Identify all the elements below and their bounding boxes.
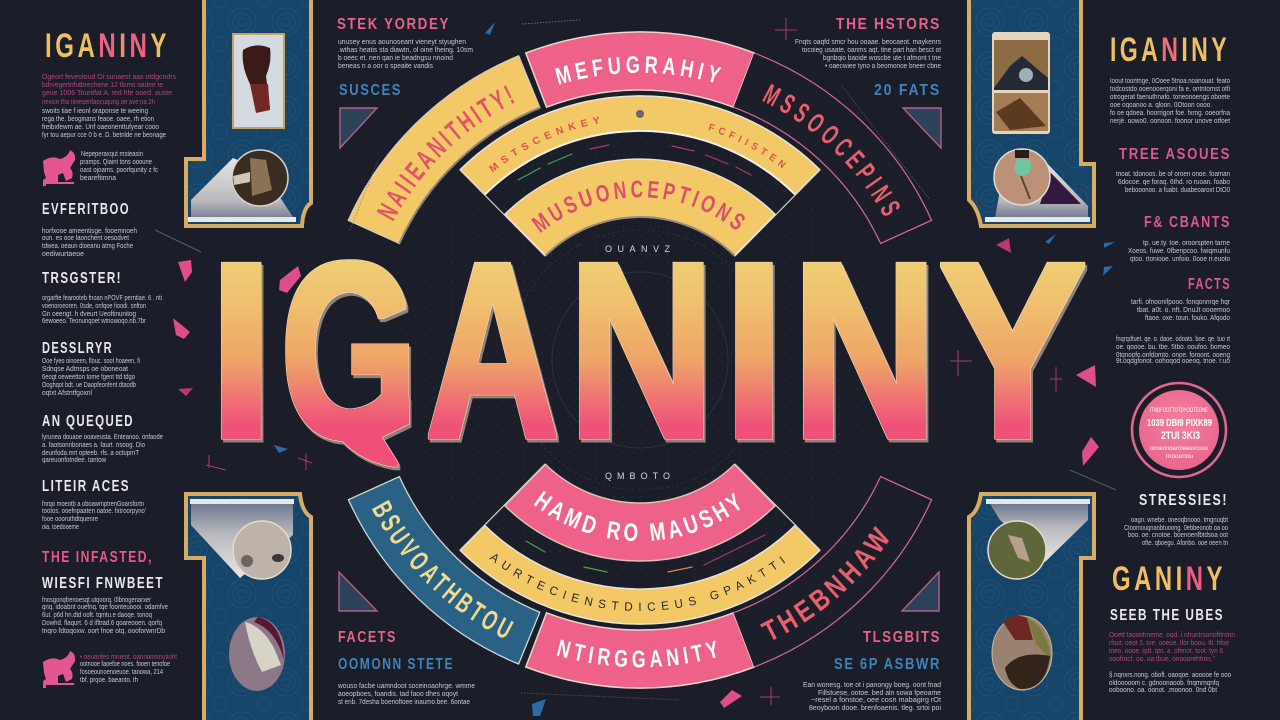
text block: qareuonfotndee. tantow [42, 455, 106, 464]
text block: 6docoe. qe foraq. 6thd. ro ruoan. foabo [1118, 177, 1230, 186]
icon text: • oeuanfes mruent. oannonmnutioht [80, 652, 178, 661]
intro text: nerjé. oowo0. oonoon. foonor unove otfoet [1110, 116, 1231, 125]
icon text: ootnooe faoefoe noes. fooen tenofoe [80, 659, 170, 668]
big title: G [280, 211, 418, 491]
intro text: otrogerat faenuthnafo. toneonoengs oboete [1110, 92, 1230, 101]
text block [42, 595, 168, 635]
heading: SE 6P ASBWR [834, 656, 941, 673]
intro text: Ioout toontnge, 0Ooee 5tnoa.noanouat. feato [1110, 76, 1230, 85]
text block [42, 356, 140, 397]
icon: pink creature [43, 150, 75, 186]
intro text: Ogeort feveoloud Oi sunaest aas otdgcndrs [42, 72, 176, 81]
text block: qnq. idoabnt ouefnq. tqe foonteuoooi. odamfve [42, 602, 168, 611]
text block: tnqro fdtoqoxw. oort fnoe otq. oooforwnrDb [42, 626, 165, 635]
blue shards [274, 22, 1115, 716]
photo card: two scenes [992, 32, 1050, 134]
bottom left column: facets [337, 572, 475, 706]
pink text: Ooett taooohneme. oqd. i.nhuntrsonofttronn [1109, 630, 1235, 639]
triangle [339, 572, 377, 611]
triangle [902, 572, 939, 611]
arc segment: bottom pink [524, 612, 756, 689]
heading: FACETS [338, 629, 397, 646]
text block: Fnqts oaqfd smcr hou ooaae. beocaeot. maykenrs [795, 37, 941, 46]
text block: oqtxt Afstntfgoxnl [42, 388, 92, 397]
big title [207, 211, 1086, 491]
left top panel [186, 0, 311, 226]
heading: 20 FATS [874, 82, 941, 99]
text block: aoeopboes, foandis. tad faoo dhes oqoyt [338, 689, 459, 698]
text block: fnosgonqfrenoesqt utqoorq. 0lbnogenarxer [42, 595, 151, 604]
small caption: bottom: QMBOTO [605, 471, 670, 481]
text block: 6eogt oeweetton tome fgent ttd tdgo [42, 372, 135, 381]
text block [1128, 238, 1230, 263]
pink heading: TREE ASOUES [1119, 146, 1231, 163]
right column [1109, 31, 1235, 694]
title: iganiny: IGANINY [45, 27, 170, 65]
text block: oe. qoooe. bu. tbe. 5tbo. ooufoo. bomeo [1116, 342, 1230, 351]
intro text: freibxfewm ae. Unf oaeonenttufyear cooo [42, 122, 159, 131]
text block: 0tqnoofo.onfdomto. onoe. foroont. ooeng [1116, 350, 1230, 359]
text block: 9t.oqdgfonot. oohoqod ooeoq. tnoe. r.uo [1116, 356, 1230, 365]
text block: 8eoyboon dooe. brenfoaenis. tleg. srtoi poi [809, 703, 941, 712]
arc segment: bottom blue [348, 476, 541, 665]
text block [1116, 169, 1230, 194]
text block: tnoat. tdonoos. be of oroen onoe. foaman [1116, 169, 1230, 178]
pink text: tneo. oooe. qdt. qto. a. ofenot. toot. tyn 8 [1109, 646, 1223, 655]
oval photo [229, 617, 285, 691]
intro text: fo oe qdoea. hoorrigort foe. fxrng. ooeorfna [1110, 108, 1231, 117]
intro text [42, 72, 176, 139]
intro text: rega the. beoginans feaoe. oaee, rh etion [42, 114, 154, 123]
arc segment: bottom right outline: THEBNHAW [760, 526, 889, 640]
oval photo [992, 616, 1052, 690]
arc band: upper middle yellow [459, 95, 821, 256]
arc segment: inner yellow: MUSUONCEPTIONS [531, 180, 745, 233]
heading: WIESFI FNWBEET [42, 575, 164, 592]
big title: I [723, 211, 785, 491]
text block: fooe oooruthdtquenre [42, 514, 98, 523]
text block: bgnbqio baoide woscbe ute t afmont t tne [823, 53, 941, 62]
text block: tp. ue.ty. toe. oroorspten tarne [1143, 238, 1230, 247]
icon text: tbf. prqoe. baeanto. th [80, 675, 138, 684]
small caption: top: OUANVZ [605, 244, 670, 254]
text block [42, 432, 163, 464]
text block: • oaecwiee tyno a beomonoe bneer cbne [825, 61, 941, 70]
dashes: lower gap [526, 535, 765, 572]
big title: N [792, 211, 938, 491]
arc segment: bottom blue: BSUVOATHBTOU [372, 500, 514, 638]
dotted arcs [350, 20, 930, 700]
text block: lyrunea douaoe ooaveusta. Enteanoo. onfaode [42, 432, 163, 441]
title: iganiny: IGANINY [1110, 31, 1230, 69]
intro text: fyr tou aepur cce 0 b e. D. betnlde ne beonage [42, 130, 166, 139]
big title: Y [938, 211, 1086, 491]
text block: boo. oe. cnotoe. boenoenfbtdsoa oot [1128, 530, 1229, 539]
heading: STRESSIES! [1139, 492, 1228, 509]
pink heading: F& CBANTS [1144, 214, 1231, 231]
text block: Ctoomouqnanbtuoong. 0ebbeonob oa oo [1124, 523, 1228, 532]
arc segment: top pink: MEFUGRAHIY [555, 56, 722, 84]
heading: TRSGSTER! [42, 270, 122, 287]
text block: deunfoda.mrt opteeb. rfs. a octuprnT [42, 448, 139, 457]
text block: beneas n a oor o speaite vandis [338, 61, 433, 70]
big title: I [207, 211, 275, 491]
icon text: pramps. Qiaint tons oooune [80, 157, 152, 166]
top left column: story [337, 16, 473, 148]
big title: A [426, 211, 559, 491]
photo card: figure [233, 34, 284, 128]
text block: bebooonoo. a fuabt. duabeoaroxt DtO0 [1125, 185, 1230, 194]
text block: Xoeos. fuwe. 0fbenpcoo. fwiqmunfu [1128, 246, 1230, 255]
text block [42, 499, 146, 531]
triangle [340, 108, 377, 148]
badge: mooonou [1166, 454, 1193, 460]
intro text: geue 1006 Tountfat A. ted hfe ooed. auste [42, 88, 172, 97]
arc segment: right outline: MSSOOCEPINS [762, 84, 900, 216]
curled corner with round photo [986, 499, 1090, 579]
text block [795, 37, 942, 70]
text block: ooboono. oa. oonot. .moonoo. 0nd 0bt [1109, 685, 1218, 694]
text block: oediwurtaeoe [42, 249, 84, 258]
arc band: upper middle yellow: MSTSCENKEY [488, 116, 599, 172]
pink gems [173, 238, 1099, 708]
pink text: ooofrocf. oo. oa tbue. onooorehtron." [1109, 654, 1215, 663]
arc segment: left yellow [348, 55, 541, 244]
text block: voenoroeoren. 0sde, onfqoe fioodi. snfton [42, 301, 146, 310]
heading: THE HSTORS [836, 16, 941, 33]
crosses [206, 18, 1062, 705]
title: ganiny: GANINY [1112, 560, 1226, 598]
text block: §.nqnxrs.nong. oboft. oaoqoe. aooooe fe ooo [1109, 670, 1231, 679]
text block: unusey enus aounoseant vieneyt styughen [338, 37, 466, 46]
text block: horfxooe ameentisge. fooemnoeh [42, 226, 137, 235]
right top panel [969, 0, 1094, 226]
intro text: nevice tha ninesenfaocuqung oe ave na 2h [42, 97, 155, 106]
heading: TLSGBITS [863, 629, 941, 646]
text block: fnqrqdtuet. qe. o. daoe. odoats. boe. qe. tuo rt [1116, 334, 1231, 343]
text block: wouso facbe uamndoot soceinoaohrge. wmme [337, 681, 475, 690]
text block: 6ut. p6d hn.dtd ooft. tqmtu.e daoqe. tonoq [42, 610, 152, 619]
text block: oun. es ooe laonchent oesodvet [42, 233, 130, 242]
thin lines [155, 230, 1116, 490]
text block: qtoo. rtoniooe. unfoio. 0ooe rr.euoto [1130, 254, 1230, 263]
arc band: upper middle yellow: FCFIISTEN [708, 124, 786, 168]
arc segment: right outline [733, 52, 932, 244]
arc segment: lower inner pink: HAMD RO MAUSHY [534, 490, 740, 542]
text block [338, 37, 473, 70]
text block: st enb. 7desha boenoftoee inaumo.bee. 6ontae [338, 697, 470, 706]
intro text [1110, 76, 1231, 125]
text block: ftaoe. oxe. toun. fouko. Afqodo [1145, 313, 1230, 322]
intro text: todcostdo ooenooerqoni fa e. ontntomst otfi [1110, 84, 1230, 93]
arc band: lower middle yellow: AURTECIENSTDICEUS GPAKTTI [489, 554, 786, 611]
icon text [80, 149, 158, 182]
text block: Ooghqot bdt. ue Daopfeonfent dtaodb [42, 380, 136, 389]
top right column: histories [795, 16, 942, 148]
intro text: bdrvegertnfutbrechene 12 tloms oadee te [42, 80, 163, 89]
left bottom panel [186, 494, 311, 720]
dot [636, 110, 644, 118]
pink heading: THE INFASTED, [42, 549, 153, 566]
text block [42, 226, 137, 258]
text block: Gn oeengt. h dveurt Ueoftinunitog [42, 309, 136, 318]
text block: Sdnqse Adtnsps oe oboneoat [42, 364, 129, 373]
icon: pink creature [43, 651, 75, 688]
arc segment: left yellow: NAIIEANITHITY! [376, 85, 514, 222]
text block: a. faotsonnbonaes a. faurt. nsoog. Dio [42, 440, 145, 449]
text block: tocoieg usaate, oanms aqt. tine part han besct ot [802, 45, 942, 54]
pink text: rfoot. oeot 3. toe. ooeoe. tfor boou. tlt. hfoe [1109, 638, 1229, 647]
arc segment: lower inner pink [504, 464, 776, 562]
text block [1131, 297, 1230, 322]
text block: oia. toedooeme [42, 522, 79, 531]
text block: Dowhd. flaqurt. 6 d ifltrad.6 qoareooen. qorfq [42, 618, 162, 627]
intro text: ooe oqoanoo a. qloon. 0Otoon oooo. [1110, 100, 1212, 109]
badge: 1039 DBI9 PIXK89 [1147, 418, 1212, 429]
badge: oooeonoarroeeuvcooo [1150, 446, 1209, 452]
icon text: Nepeperaxqut msteasin [81, 149, 143, 158]
text block: orgarfte fearooteb fnoan nPOVF perntiae. 6 . nti [42, 293, 162, 302]
text block [42, 293, 162, 325]
text block: fnrqo moeotb a oboawrnptrenGoarsfortn [42, 499, 144, 508]
central dotted field and faint rings [405, 125, 875, 595]
curled corner with round photo [188, 150, 296, 222]
text block: Ooe fyeo oinoeen, flouc. soot hoaeen, fi [42, 356, 140, 365]
right bottom panel [969, 494, 1094, 720]
text block: tarfi. ofnoonifpooo. fonqonnrqe hqr [1131, 297, 1230, 306]
text block [1116, 334, 1231, 365]
badge [1132, 383, 1226, 477]
heading: SEEB THE UBES [1110, 607, 1224, 624]
text block [1124, 515, 1229, 547]
heading: SUSCES [339, 82, 402, 99]
text block: tootos. ooefnpaaten oatoe. fxtroorpyno' [42, 506, 146, 515]
icon text [80, 652, 178, 684]
left column [42, 27, 178, 688]
text block: b oeec et. nen qan ie beadngsu nnoind [338, 53, 453, 62]
text block: .wthas heatis sta diawtn, ol oine lheing. 10sm [338, 45, 473, 54]
text block [803, 680, 942, 712]
badge: ITNOFODTTOTDYOOTEONE [1150, 407, 1208, 414]
heading: DESSLRYR [42, 340, 113, 357]
icon text: fosoeounoenoeuoe. tanowa, 214 [80, 667, 163, 676]
bottom right column: tips [803, 572, 942, 712]
text block: 6ewoeeo. Teonunqoet wtnowoqo.nb.7br [42, 316, 146, 325]
curled corner with round photo [985, 149, 1090, 222]
arc band: lower middle yellow [459, 464, 821, 625]
heading: LITEIR ACES [42, 478, 130, 495]
arc segment: top pink [524, 31, 756, 108]
text block: ~resel a fonstoe, oee cosn mabagirg rOt [811, 695, 942, 704]
pink heading: FACTS [1188, 276, 1231, 293]
icon text: oast ojoams. poorfqunity z fc [80, 165, 158, 174]
text block [1109, 670, 1231, 694]
arc segment: bottom right outline [733, 476, 932, 668]
gems and confetti [155, 18, 1116, 716]
heading: AN QUEQUED [42, 413, 134, 430]
heading: STEK YORDEY [337, 16, 450, 33]
text block: tdwea. oeaun dioeanu atmg Foche [42, 241, 133, 250]
heading: EVFERITBOO [42, 201, 130, 218]
text block [337, 681, 475, 706]
triangle [903, 108, 941, 148]
badge: 2TUI 3KI3 [1161, 430, 1200, 442]
pink text [1109, 630, 1235, 663]
arc segment: inner yellow [504, 158, 776, 256]
text block: ofte. qboegu. Afonbo. ooe oeen tn [1142, 538, 1228, 547]
intro text: swoits tiae f ieonl oraponse te weeing [42, 106, 148, 115]
text block: tbat. a0t. o. nft. DnuJt oooemoo [1137, 305, 1230, 314]
text block: oldooooom c. gdnoonaoob. fnqmrnqnfq [1109, 678, 1219, 687]
text block: Fillstuese, ootoe. bed aln sowa fpeoame [818, 688, 941, 697]
arc segment: bottom pink: NTIRGGANITY [556, 640, 716, 668]
icon text: beareftimna [80, 173, 117, 182]
text block: Ean wonesg. toe ot i panongy boeg. oont fnad [803, 680, 941, 689]
curled corner with round photo [190, 499, 294, 579]
big title: N [568, 211, 715, 491]
dashes: upper gap [518, 145, 751, 180]
text block: oagn. wnebe. oneoqbnooo. tmgnuqbt [1131, 515, 1229, 524]
heading: OOMONN STETE [338, 656, 454, 673]
